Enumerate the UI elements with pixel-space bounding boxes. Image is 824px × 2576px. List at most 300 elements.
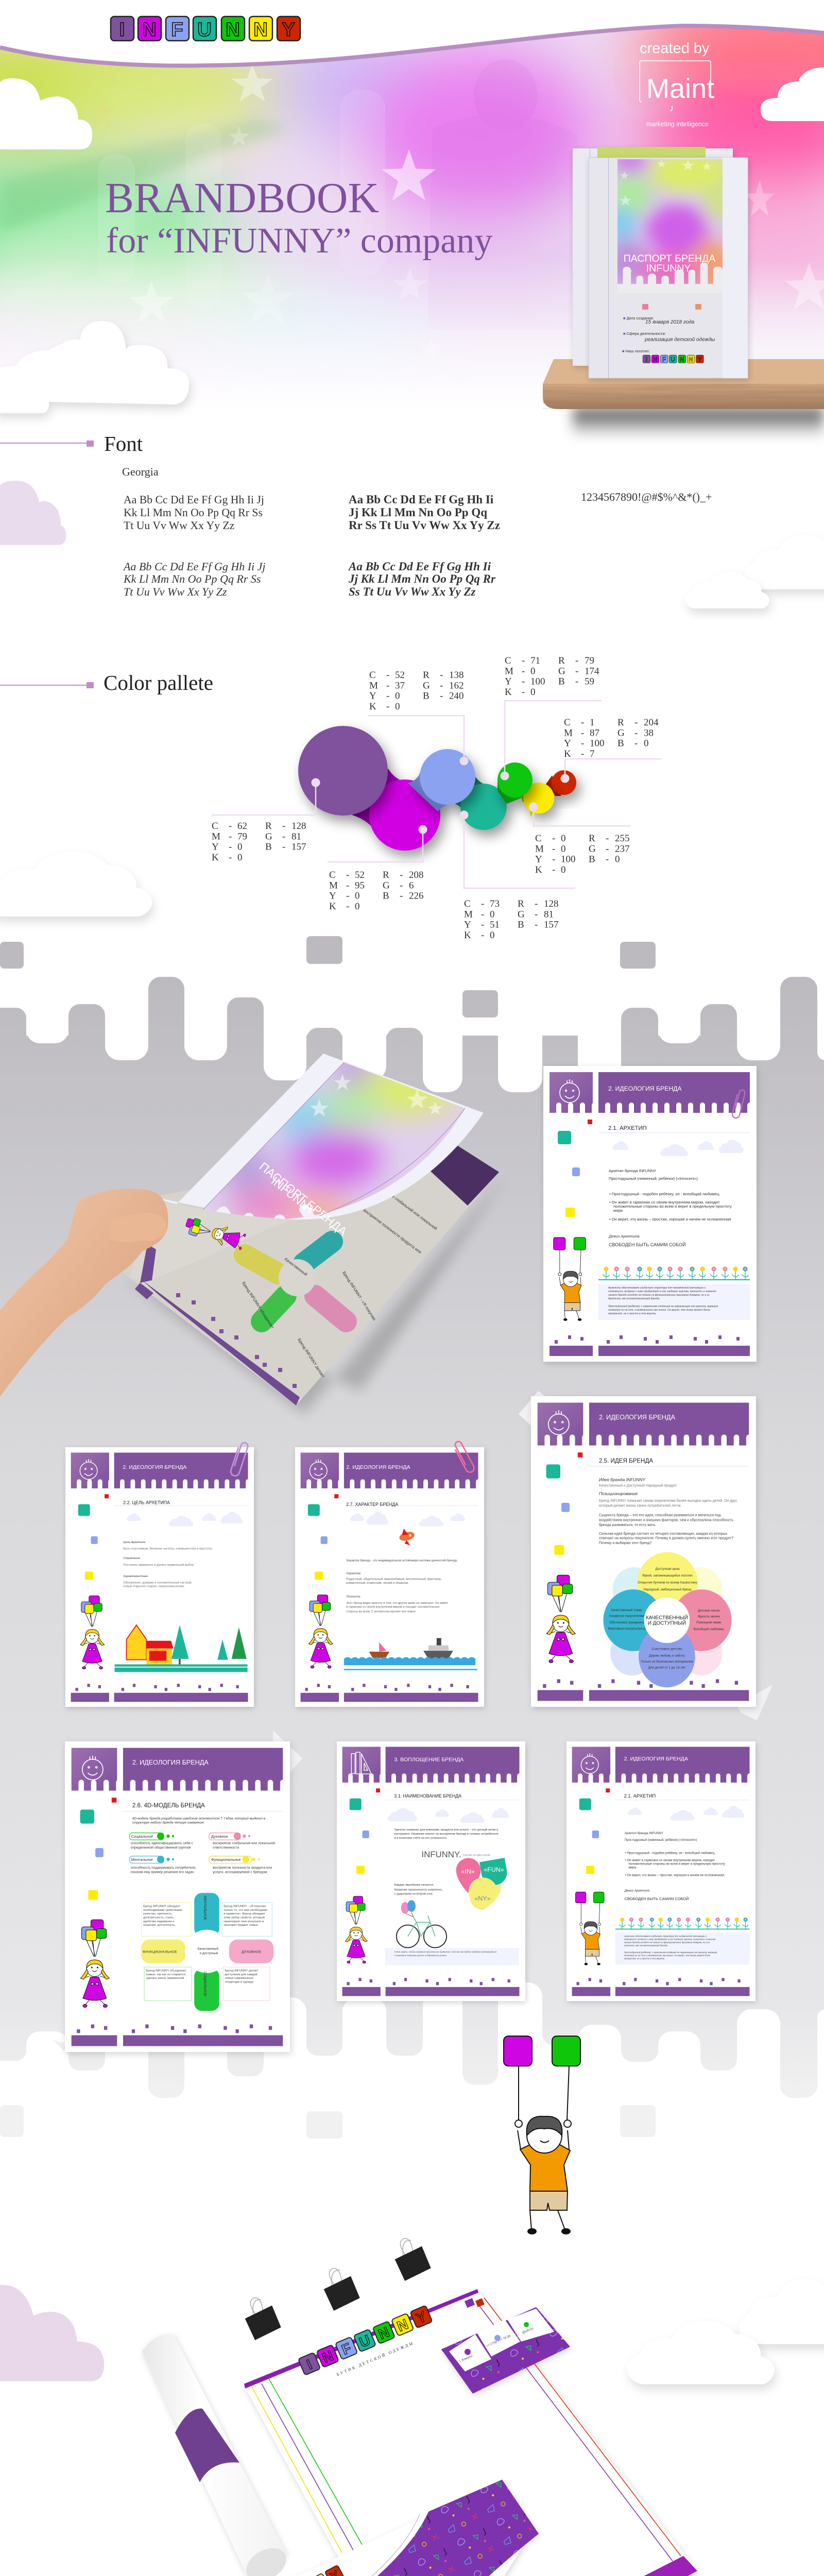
4D pills: услуги, ассоциируемой с брендом xyxy=(213,1870,267,1874)
color values: teal: 51 xyxy=(490,920,500,930)
color values: purple: Y xyxy=(212,842,219,853)
cross diagram: Бренд INFUNNY объединяет xyxy=(146,1969,186,1972)
cross diagram: доступным для каждой xyxy=(225,1973,258,1976)
cross diagram: экономит бюджет семьи. xyxy=(224,1924,259,1927)
page: 2.1 archetype repeat: Архетип бренда INFUNNY xyxy=(625,1832,663,1835)
cross diagram: только то, что мне необходимо xyxy=(224,1909,268,1912)
color values: green: 0 xyxy=(530,687,536,698)
color values: teal: - xyxy=(481,930,484,941)
page: 2.5 brand idea: Бренд INFUNNY помогает своим покупателям более выгодно одеть детей. Он друг, xyxy=(599,1499,737,1503)
cross diagram: гарантирует мне результат и xyxy=(224,1920,264,1923)
cross diagram: Качественный xyxy=(198,1947,218,1951)
thumb xyxy=(108,1213,166,1242)
cover title: ПАСПОРТ БРЕНДА xyxy=(257,1160,350,1239)
4D pills: Духовное xyxy=(211,1834,228,1839)
text on lower sheet: Качественный xyxy=(284,1257,308,1277)
color values: purple: - xyxy=(282,821,285,832)
italic alphabet: Kk Ll Mm Nn Oo Pp Qq Rr Ss xyxy=(123,572,261,585)
color values: magenta: G xyxy=(383,880,390,891)
petal diagram: Обстановка праздника xyxy=(609,1620,644,1624)
cross diagram: семью, так как он старается xyxy=(146,1973,185,1976)
color values: teal: 73 xyxy=(490,899,500,909)
cross diagram: ФУНКЦИОНАЛЬНОЕ xyxy=(143,1951,177,1954)
cross diagram centre xyxy=(279,1259,316,1296)
cross diagram: сделать жизнь правильной. xyxy=(146,1976,185,1980)
page: 2.1 archetype: Простодушный (ребёнок), с изумлением глядящий на окружающую его красоту, верящий, xyxy=(608,1304,718,1308)
title: for “INFUNNY” company xyxy=(106,221,492,261)
callout lines xyxy=(212,701,661,888)
color values: purple: - xyxy=(229,842,232,853)
purple band right xyxy=(420,1142,499,1213)
letterhead footer xyxy=(418,2556,697,2576)
cross diagram: удобство надевания и xyxy=(143,1920,175,1923)
petal diagram: Конфетки покупателям xyxy=(609,1615,644,1618)
page: 2.5 brand idea: Качественный и Доступный Народный продукт xyxy=(599,1483,677,1487)
blob: green xyxy=(497,762,533,804)
cross diagram: качество, прочность, xyxy=(143,1912,173,1916)
section heading: Font xyxy=(0,432,143,455)
color values: blue: 138 xyxy=(449,670,464,681)
color values: red: - xyxy=(634,738,638,749)
page: 2.7 brand character: Радостный, общительный, миролюбивый, мечтательный, фантазер, xyxy=(346,1577,442,1581)
color values: green: 71 xyxy=(530,655,540,666)
color values: purple: M xyxy=(212,831,220,842)
section heading: Font: Font xyxy=(104,432,143,455)
color values: green: C xyxy=(505,655,511,666)
color values: yellow: 0 xyxy=(561,833,565,844)
page: 2.7 brand character: романтичный, искренний, легкий в общении. xyxy=(346,1581,409,1585)
business cards: @info.kz xyxy=(522,2327,534,2335)
cover title: INFUNNY xyxy=(269,1174,318,1217)
created by Maint logo: marketing intelligence xyxy=(646,121,709,128)
created by Maint logo xyxy=(640,40,714,128)
shelf book front copy: ■ Сфера деятельности: xyxy=(623,331,666,336)
color values: blue: 52 xyxy=(395,670,405,681)
italic alphabet: Aa Bb Cc Dd Ee Ff Gg Hh Ii Jj xyxy=(123,560,266,573)
shelf book front copy: 15 января 2018 года xyxy=(645,319,695,325)
page: 2.7 brand character: 2. ИДЕОЛОГИЯ БРЕНДА xyxy=(346,1464,411,1470)
color values: red: M xyxy=(564,727,573,738)
color values: purple: B xyxy=(265,842,272,853)
roll opening xyxy=(241,2541,292,2576)
color values: magenta: 6 xyxy=(409,880,414,891)
page: 2.2 archetype goal: Цель Архетипа xyxy=(123,1541,146,1544)
petal diagram: Помощник маме xyxy=(696,1621,722,1624)
cross diagram: этим набор свойств, который xyxy=(224,1916,265,1920)
color values: yellow: 0 xyxy=(561,843,565,854)
color values: green: Y xyxy=(505,676,512,687)
4D pills: способность поддерживать потребителя, xyxy=(131,1866,196,1870)
cloud: lilac left lower xyxy=(0,2285,104,2381)
color values: red xyxy=(564,717,659,759)
color values: teal: B xyxy=(518,920,524,930)
digits and symbols: 1234567890!@#$%^&*()_+ xyxy=(581,490,712,503)
shelf book front copy: реализация детской одежды xyxy=(644,337,715,343)
petal diagram: Счастливое детство xyxy=(651,1648,682,1651)
color values: purple: - xyxy=(229,831,232,842)
cover inner lines xyxy=(202,1062,465,1216)
page: 2.6 4D brand model: 2. ИДЕОЛОГИЯ БРЕНДА xyxy=(132,1759,209,1766)
color values: magenta: - xyxy=(346,891,349,902)
page: 3.1 brand naming: 3. ВОПЛОЩЕНИЕ БРЕНДА xyxy=(394,1757,464,1763)
page: 2.1 archetype: прекрасной, но и просто в это верить. xyxy=(608,1312,657,1315)
binder clips xyxy=(239,2233,432,2341)
page: 2.2 archetype goal: 2. ИДЕОЛОГИЯ БРЕНДА xyxy=(123,1464,187,1470)
color values: yellow: 255 xyxy=(615,833,629,844)
color values: red: 38 xyxy=(644,727,654,738)
color values: yellow: C xyxy=(535,833,542,844)
purple band xyxy=(175,2409,239,2482)
color values: magenta: - xyxy=(400,891,403,902)
color values: purple: - xyxy=(229,852,232,863)
color values: blue: - xyxy=(386,680,389,691)
4D pills: восприятие глобальной или локальной xyxy=(213,1841,275,1845)
color values: teal: 0 xyxy=(490,930,494,941)
rainbow rays xyxy=(1,31,819,238)
cloud: hero top right xyxy=(761,67,824,121)
page: 2.1 archetype repeat: прекрасной, но и просто в это верить. xyxy=(624,1957,665,1960)
page: 2.1 archetype: 2.1. АРХЕТИП xyxy=(608,1125,647,1131)
page: 2.6 4D brand model: 4D-модель бренда разработана шведским экономистом Т. Гэдом, который выделил в xyxy=(132,1816,266,1820)
color values: blue: R xyxy=(423,670,430,681)
color values: purple: G xyxy=(265,831,272,842)
color values: teal: R xyxy=(518,899,524,909)
color values: blue: - xyxy=(386,691,389,702)
text on lower sheet: восприятие полезности продукта или xyxy=(363,1208,422,1255)
tape corners behind brand idea page xyxy=(519,1391,772,1721)
color values: green: 79 xyxy=(585,655,594,666)
color values: red: - xyxy=(634,717,638,728)
color values: red: 7 xyxy=(590,749,594,759)
color values: purple: 128 xyxy=(291,821,306,832)
color palette blob chart xyxy=(212,701,661,888)
4D pills xyxy=(130,1833,275,1874)
color values: teal: - xyxy=(481,920,484,930)
page: 2.1 archetype repeat: • Простодушный - подобен ребёнку, он - всеобщий любимец. xyxy=(625,1852,715,1855)
bold alphabet: Aa Bb Cc Dd Ee Ff Gg Hh Ii xyxy=(349,493,494,506)
color values: yellow: - xyxy=(606,843,609,854)
letterhead sheet: БУТИК ДЕТСКОЙ ОДЕЖДЫ xyxy=(336,2341,415,2377)
color values: teal: M xyxy=(464,909,473,920)
color values: blue: 37 xyxy=(395,680,405,691)
blob: purple xyxy=(298,726,388,816)
petal diagram: Только из безопасных материалов xyxy=(641,1659,693,1664)
page: 2.7 brand character: стороны во всем. С интересом изучает все новое. xyxy=(346,1611,417,1613)
page: 2.2 archetype goal: Стратегия xyxy=(123,1557,140,1560)
callout dots xyxy=(311,756,570,834)
page: 2.5 brand idea: воздействием внутренних и внешних факторов, чем и обусловлена способность xyxy=(599,1518,733,1522)
page: 2.7 brand character: 2.7. ХАРАКТЕР БРЕНДА xyxy=(346,1502,398,1507)
color values: green: - xyxy=(522,676,525,687)
page: 2.1 archetype repeat: Архетипа, как основополагающей бренда. xyxy=(624,1944,668,1947)
color values: yellow: - xyxy=(552,843,555,854)
bold italic alphabet: Aa Bb Cc Dd Ee Ff Gg Hh Ii xyxy=(348,560,491,573)
page: 2.6 4D brand model xyxy=(63,1741,294,2057)
petal diagram: Для детей от 1 до 14 лет xyxy=(648,1665,685,1669)
color values: yellow: G xyxy=(589,843,596,854)
section heading: Color pallete xyxy=(0,671,213,694)
color values: blue: K xyxy=(369,701,376,712)
page: 3.1 brand naming: Каждая звукобуква читается. xyxy=(394,1884,434,1887)
color values: purple: 62 xyxy=(237,821,247,832)
cross diagram xyxy=(141,1893,273,2011)
cross diagram: долговечность, стиль, xyxy=(143,1917,174,1920)
rounded faded bars xyxy=(98,91,385,239)
girl on flap xyxy=(183,1214,247,1251)
color values: teal: 81 xyxy=(544,909,554,920)
page: 2.1 archetype: • Простодушный - подобен ребёнку, он - всеобщий любимец. xyxy=(609,1192,720,1196)
petal diagram: КАЧЕСТВЕННЫЙ xyxy=(646,1614,688,1621)
4D pills: определенной общественной группой xyxy=(131,1845,191,1850)
color values: red: 100 xyxy=(590,738,605,749)
color values: red: C xyxy=(564,717,571,728)
color values: yellow xyxy=(535,833,629,875)
tape corners behind 4D model page xyxy=(53,1731,302,2058)
page: 2.1 archetype repeat: СВОБОДЕН БЫТЬ САМИМ СОБОЙ xyxy=(625,1896,689,1901)
created by Maint logo: Maint xyxy=(646,73,714,104)
bold alphabet: Rr Ss Tt Uu Vv Ww Xx Yy Zz xyxy=(349,519,500,532)
cloud: white right back xyxy=(744,535,824,589)
color values: red: 1 xyxy=(590,717,594,728)
text on lower sheet: Бренд INFUNNY делает xyxy=(297,1337,325,1379)
page: 3.1 brand naming: и в конечном счёте на его успешность. xyxy=(394,1837,448,1840)
color values: blue: - xyxy=(386,670,389,681)
title xyxy=(105,174,492,261)
color values: teal: - xyxy=(481,909,484,920)
color values: purple: 0 xyxy=(237,842,242,853)
blob: magenta xyxy=(352,769,440,851)
rainbow cover art xyxy=(203,1062,465,1219)
paper clip xyxy=(732,1089,746,1119)
bicycle xyxy=(397,1900,447,1947)
page: 2.1 archetype: мира. xyxy=(613,1208,624,1213)
page: 2.1 archetype repeat: несмотря ни на что, в возможность при жизни. Он верит, что жизнь может быть xyxy=(624,1954,711,1957)
color values: blue: B xyxy=(423,691,430,702)
petal diagram: Детские песни xyxy=(698,1609,720,1613)
page: 2.1 archetype: значимости, встреча с ними пробуждает в нас глубокие чувства. Ценности и значения xyxy=(608,1290,716,1293)
color values: yellow: 100 xyxy=(561,854,576,865)
color values: red: 87 xyxy=(590,727,599,738)
color values: blue: C xyxy=(369,670,376,681)
title: BRANDBOOK xyxy=(105,174,379,222)
cross diagram: МЕНТАЛЬНОЕ xyxy=(203,1895,207,1920)
wooden shelf xyxy=(543,359,824,438)
page: 2.7 brand character: Характер xyxy=(346,1572,361,1575)
color values: yellow: Y xyxy=(535,854,542,865)
character: boy with balloons xyxy=(504,2036,580,2234)
color values: red: - xyxy=(581,727,584,738)
page: 2.1 archetype repeat: 2. ИДЕОЛОГИЯ БРЕНДА xyxy=(624,1756,689,1762)
color values: teal: C xyxy=(464,899,471,909)
page: 2.1 archetype: Архетипа, как основополагающей бренда. xyxy=(608,1297,660,1300)
page: 2.5 brand idea: отвечает на вопросы покупателя: Почему я должен купить именно этот продукт? xyxy=(599,1536,733,1540)
page: 2.7 brand character: Характер бренда - это индивидуальная устойчивая система ценностей бренда. xyxy=(346,1558,458,1562)
page: 2.2 archetype goal: 2.2. ЦЕЛЬ АРХЕТИПА xyxy=(123,1500,170,1505)
envelope pattern xyxy=(244,2480,539,2576)
color values: red: 204 xyxy=(644,717,659,728)
page: 2.5 brand idea: 2.5. ИДЕЯ БРЕНДА xyxy=(599,1458,653,1464)
page: 2.1 archetype repeat: нашего бренда исходят не только из функциональных признаков товаров, но и из xyxy=(624,1941,710,1944)
brochure mockup held by hand xyxy=(0,1051,507,1414)
color values: green: R xyxy=(558,655,565,666)
cloud: hero bottom left xyxy=(0,321,189,413)
page: 2.1 archetype: нашего бренда исходят не только из функциональных признаков товаров, но и из xyxy=(608,1294,710,1297)
color values: red: B xyxy=(617,738,624,749)
color values: blue: - xyxy=(440,670,443,681)
color values: magenta: - xyxy=(400,880,403,891)
color values: yellow: - xyxy=(552,833,555,844)
color values: purple: C xyxy=(212,821,218,832)
created by Maint logo: created by xyxy=(640,40,710,57)
cross diagram: необходимыми свойствами: xyxy=(143,1908,183,1912)
bold italic alphabet: Ss Tt Uu Vv Ww Xx Yy Zz xyxy=(349,585,475,598)
page: 2.1 archetype: положительные стороны во всем и верит в предельную простоту xyxy=(613,1204,732,1209)
page: 3.1 brand naming: 3.1. НАИМЕНОВАНИЕ БРЕНДА xyxy=(394,1793,461,1799)
page: 2.1 archetype repeat: Простодушный (невинный, ребёнок) («Innocent») xyxy=(625,1838,697,1842)
coloured margin lines xyxy=(251,2298,681,2561)
page: 2.1 archetype: Простодушный (невинный, ребёнок) («Innocent») xyxy=(609,1176,698,1181)
shelf book back copy xyxy=(573,147,733,366)
color values: green: 174 xyxy=(585,666,599,676)
page: 2.5 brand idea: Сущность бренда – это его идея, способная развиваться и меняться под xyxy=(599,1513,720,1517)
color values: magenta: R xyxy=(383,870,389,880)
color values: yellow: B xyxy=(589,854,595,865)
house and trees xyxy=(114,1625,248,1672)
color values: red: 0 xyxy=(644,738,649,749)
font sample: Georgia xyxy=(122,465,712,598)
cross diagram: ношения, доступность. xyxy=(143,1924,176,1927)
4D pills: ответственности xyxy=(213,1846,239,1850)
font sample: Georgia: Georgia xyxy=(122,465,159,478)
page: 2.1 archetype xyxy=(542,1065,760,1366)
page: 2.7 brand character: Этот бренд видит красоту в том, что другие даже не замечают. Он живет xyxy=(346,1602,449,1605)
page: 2.7 brand character: Личность xyxy=(346,1596,360,1599)
page: 2.2 archetype goal xyxy=(64,1442,256,1710)
color values: purple: - xyxy=(282,831,285,842)
color values: yellow: - xyxy=(606,854,609,865)
color values: blue: 162 xyxy=(449,680,464,691)
italic alphabet: Tt Uu Vv Ww Xx Yy Zz xyxy=(124,585,227,598)
page: 2.1 archetype: Архетипы обеспечивают глубинную структуру для человеческой мотивации и xyxy=(608,1286,706,1290)
color values: green: B xyxy=(558,676,565,687)
cross diagram: тенденции в одежде. xyxy=(225,1981,254,1984)
color values: green: 0 xyxy=(530,666,536,676)
4D pills: показав ему пример решения его задач xyxy=(131,1870,194,1874)
color values: teal: - xyxy=(535,909,538,920)
color values: magenta: 208 xyxy=(409,870,423,880)
letterhead logo: INFUNNY xyxy=(304,2308,429,2372)
color values: magenta xyxy=(329,870,423,912)
business cards xyxy=(441,2307,570,2394)
page: 3.1 brand naming xyxy=(336,1741,528,2005)
color values: green: - xyxy=(522,666,525,676)
color values: green: - xyxy=(575,655,578,666)
page: 2.5 brand idea: который делает жизнь своих потребителей легче. xyxy=(599,1503,682,1507)
page: 2.6 4D brand model: 2.6. 4D-МОДЕЛЬ БРЕНДА xyxy=(132,1803,205,1809)
color values: red: - xyxy=(581,717,584,728)
color values: magenta: - xyxy=(346,870,349,880)
petal diagram: Качественный товар xyxy=(611,1608,642,1612)
petal diagram: Яркий, запоминающийся логотип xyxy=(642,1573,693,1578)
color values: green: - xyxy=(522,687,525,698)
cloud: white right front xyxy=(685,572,769,608)
envelope logo xyxy=(232,2565,345,2576)
purple band lower left xyxy=(142,1280,300,1405)
4D pills: Ментальное xyxy=(131,1857,153,1862)
color values: teal: - xyxy=(481,899,484,909)
page: 2.2 archetype goal: Характеристики xyxy=(123,1575,148,1578)
color values: purple: 157 xyxy=(291,842,306,853)
color values: green: M xyxy=(505,666,513,676)
cloud: hero top left xyxy=(0,78,92,149)
cloud: white left xyxy=(0,852,152,917)
color values: yellow: M xyxy=(535,843,544,854)
page: 3.1 brand naming: INFUNNY. xyxy=(421,1850,461,1859)
shelf book front copy xyxy=(589,149,748,378)
page: 2.5 brand idea: Почему я выбираю этот бренд? xyxy=(599,1541,652,1545)
cloud: white right back lower xyxy=(739,2279,824,2344)
color values: yellow: - xyxy=(552,865,555,875)
regular alphabet: Kk Ll Mm Nn Oo Pp Qq Rr Ss xyxy=(124,506,263,519)
color values: magenta: 0 xyxy=(355,901,359,912)
color values: magenta: 0 xyxy=(355,891,359,902)
page: 2.1 archetype: Девиз Архетипа: xyxy=(608,1234,640,1239)
color values: purple: R xyxy=(265,821,272,832)
turned page underside xyxy=(130,1196,294,1282)
petal diagram: Дарим любовь и заботу xyxy=(649,1653,685,1657)
color values: blue: 240 xyxy=(449,691,464,702)
paper roll xyxy=(142,2334,292,2576)
blob: blue xyxy=(408,749,475,811)
page: 2.1 archetype repeat: значимости, встреча с ними пробуждает в нас глубокие чувства. Ценности и значения xyxy=(624,1938,716,1940)
color values: magenta: - xyxy=(346,880,349,891)
color values: green: G xyxy=(558,666,565,676)
color values: blue: 0 xyxy=(395,701,400,712)
blob: teal xyxy=(453,777,507,830)
color values: red: - xyxy=(581,749,584,759)
page: 2.1 archetype: несмотря ни на что, в возможность при жизни. Он верит, что жизнь может быть xyxy=(608,1309,710,1312)
regular alphabet: Tt Uu Vv Ww Xx Yy Zz xyxy=(124,519,235,532)
page: 2.1 archetype: • Он верит, что жизнь – простая, хорошая и ничем не осложненная xyxy=(609,1217,731,1222)
blob: yellow xyxy=(521,783,554,817)
page: 2.5 brand idea: Сильная идея бренда состоит из четырех составляющих, каждая из которых xyxy=(599,1532,728,1536)
plane xyxy=(399,1529,416,1546)
color values: green: 100 xyxy=(530,676,545,687)
logo INFUNNY: INFUNNY xyxy=(119,19,295,41)
color values: blue: - xyxy=(440,691,443,702)
color values: red: R xyxy=(617,717,624,728)
curled sheet cover xyxy=(150,1054,484,1219)
color values: purple: - xyxy=(282,842,285,853)
text on lower sheet: Духовное xyxy=(393,1166,411,1181)
color values: purple xyxy=(212,821,306,863)
color values: magenta: K xyxy=(329,901,336,912)
color values: teal: 0 xyxy=(490,909,494,920)
petal diagram: И ДОСТУПНЫЙ xyxy=(648,1619,686,1626)
page: 3.1 brand naming: и помогать Компании расти и добиваться успеха. xyxy=(394,1954,447,1957)
cloud: lilac left xyxy=(0,481,66,545)
color values: teal: 128 xyxy=(544,899,558,909)
color values: red: - xyxy=(581,738,584,749)
hero wave border xyxy=(0,26,824,66)
color values: blue: - xyxy=(386,701,389,712)
petal diagram: Вежливые консультанты xyxy=(608,1627,645,1631)
petal diagram: Народный, амбициозный бренд xyxy=(643,1587,692,1591)
syllable petals xyxy=(456,1858,509,1910)
page: 2.1 archetype repeat: • Он живет в гармонии со своим внутренним миром, находит xyxy=(625,1859,715,1862)
color values: purple: 79 xyxy=(237,831,247,842)
letterhead sheet xyxy=(244,2289,697,2576)
